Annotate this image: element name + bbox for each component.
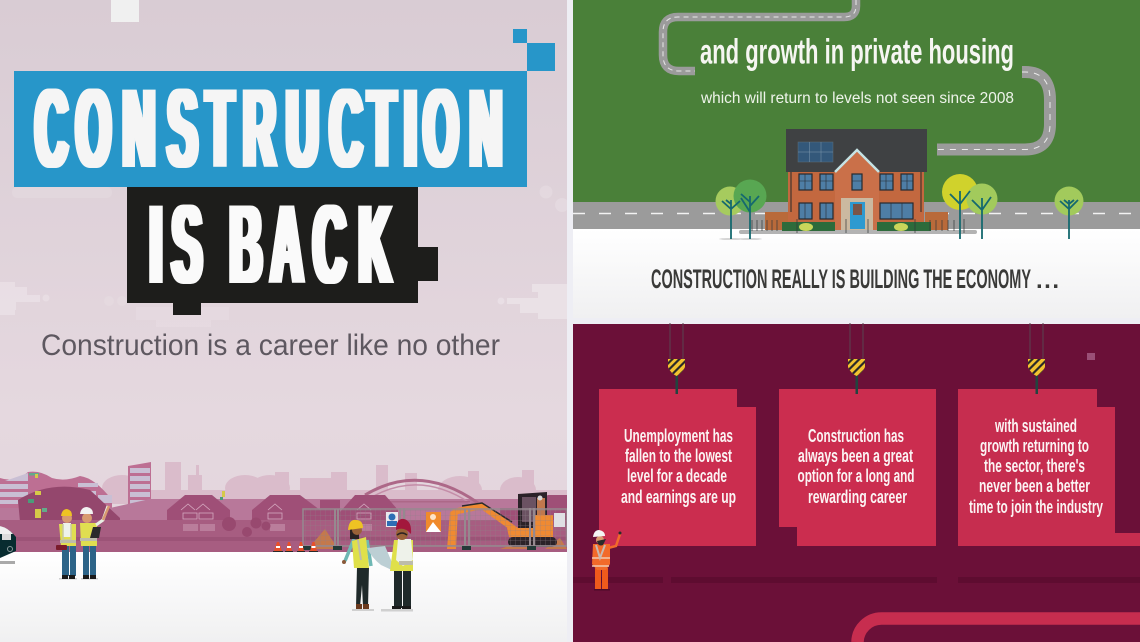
site fence [302, 508, 567, 550]
winding road: upper [663, 0, 856, 71]
clouds [0, 282, 567, 319]
card: great option [779, 389, 936, 546]
van [0, 526, 16, 564]
mid band [0, 498, 518, 520]
traffic cones [273, 542, 318, 552]
curved pavilion [18, 487, 120, 522]
worker: yellow hat with tool [56, 509, 77, 580]
hook 3 [1026, 323, 1046, 393]
panel: title and site scene [0, 0, 569, 642]
card: unemployment: and earnings are up [621, 486, 736, 507]
subtitle: Construction is a career like no other [41, 329, 500, 362]
title banner: Construction: CONSTRUCTION [35, 67, 502, 192]
panel: private housing [573, 0, 1140, 318]
panel: careers [573, 323, 1140, 642]
bridge arch [365, 480, 478, 503]
winding road: lower [937, 72, 1050, 150]
worker: orange hi-vis [592, 530, 622, 590]
blueprint [367, 546, 392, 570]
card: great option: always been a great [798, 445, 913, 466]
card: sustained growth [958, 389, 1140, 546]
trees [716, 174, 1084, 240]
red pipe [858, 618, 1140, 642]
hook 2 [846, 323, 866, 393]
white strip [573, 229, 1140, 318]
sign: blue safety [386, 512, 398, 527]
wavy roof building [0, 472, 112, 508]
front band [0, 520, 567, 552]
card: unemployment [599, 389, 756, 546]
house [739, 129, 977, 234]
ground line [573, 577, 1140, 583]
white fence panel [554, 513, 565, 527]
card: sustained growth: the sector, there's [984, 455, 1085, 476]
card: great option: rewarding career [808, 486, 907, 507]
skyline background [0, 462, 567, 552]
card: unemployment: Unemployment has [624, 425, 733, 446]
decorative square: white [111, 0, 139, 22]
card: unemployment: level for a decade [627, 465, 727, 486]
site: sand piles [308, 529, 567, 549]
card: great option: option for a long and [798, 465, 914, 486]
small square [1087, 353, 1095, 360]
decorative squares: blue [513, 29, 555, 71]
sign: orange [426, 512, 441, 532]
hook 1 [666, 323, 686, 393]
coloured panels [28, 473, 225, 518]
card: sustained growth: with sustained [994, 415, 1077, 436]
ground road [573, 202, 1140, 229]
worker: man with turban [381, 519, 413, 612]
excavator [447, 492, 557, 549]
card: great option: Construction has [808, 425, 904, 446]
houses row [167, 495, 567, 522]
card: unemployment: fallen to the lowest [625, 445, 732, 466]
tower [128, 462, 151, 504]
worker: woman with yellow hat [342, 520, 374, 611]
subheading: which will return to levels not seen since 2008 [700, 90, 1014, 107]
closing statement: ... [1036, 267, 1059, 294]
worker: white hat with clipboard [80, 506, 109, 580]
title banner: Is Back: IS BACK [150, 183, 391, 308]
ground [0, 552, 567, 606]
